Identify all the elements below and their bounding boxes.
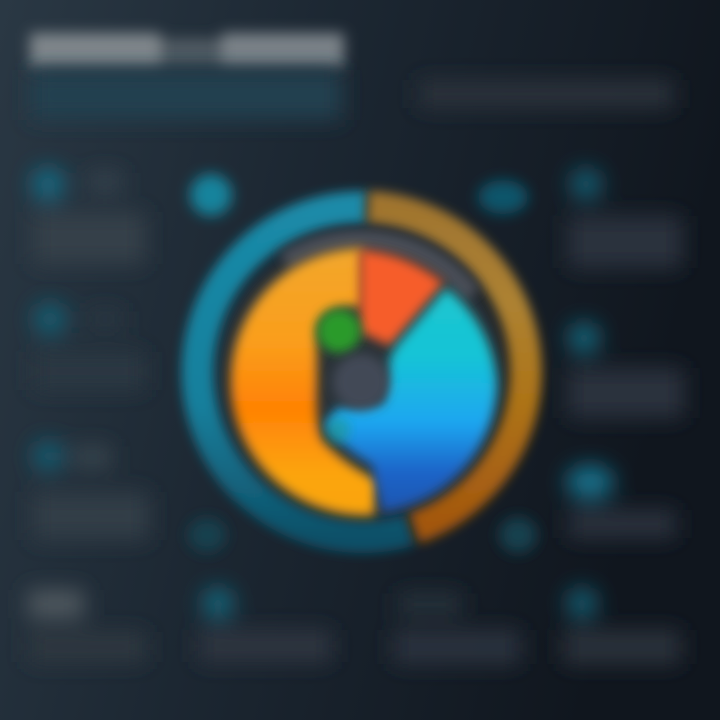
- inner backing disc: [220, 236, 504, 520]
- pie slice: orange: [231, 248, 377, 515]
- bottom row text blocks: [28, 587, 681, 664]
- title block: [30, 33, 344, 67]
- green centre blob: [317, 309, 361, 353]
- left item 2: [33, 302, 145, 390]
- bottom item 4: [563, 587, 681, 664]
- right item 3: [566, 465, 676, 538]
- bottom item 1: [28, 590, 146, 662]
- dot bottom left: [188, 518, 226, 552]
- pie slice: red: [360, 250, 444, 346]
- left item 3: [32, 440, 149, 540]
- pie slice: cyan and blue: [325, 288, 497, 512]
- teal notch: [326, 417, 350, 443]
- bottom item 3: [393, 593, 521, 664]
- left column text blocks: [31, 167, 149, 540]
- dot top right: [478, 180, 528, 214]
- dot top left: [190, 174, 232, 216]
- outer ring: amber arc: [368, 207, 526, 528]
- donut chart: [198, 207, 526, 537]
- outer ring: teal arc: [198, 207, 410, 537]
- bottom item 2: [198, 587, 332, 662]
- dark centre hub: [333, 354, 389, 410]
- right column text blocks: [566, 168, 684, 538]
- inner grey band: [285, 240, 472, 295]
- right item 2: [568, 322, 684, 418]
- right item 1: [568, 168, 682, 268]
- dot bottom right: [499, 517, 537, 553]
- left item 1: [31, 167, 145, 264]
- subtitle block: [30, 70, 342, 120]
- top-right caption: [418, 80, 674, 108]
- floating teal dots: [188, 174, 537, 553]
